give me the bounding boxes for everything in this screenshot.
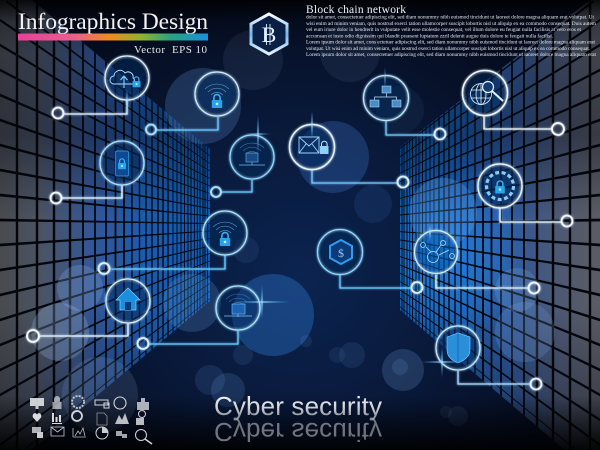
- icon: cloud lock circle: [105, 56, 149, 100]
- icon: laptop wifi circle: [230, 135, 274, 179]
- icon: wifi lock circle centre: [203, 211, 247, 255]
- left perspective grid wall: [0, 0, 210, 450]
- icon: dollar hexagon circle: $: [338, 246, 344, 260]
- icon: laptop circle: [216, 286, 260, 330]
- icon: blockchain hexagon logo: [251, 14, 287, 54]
- icon: shield circle: [436, 326, 480, 370]
- title: Infographics Design: [18, 9, 208, 35]
- icon: blockchain hexagon logo: B: [262, 22, 276, 47]
- body text block: volutpat. Ut wisi enim ad minim veniam, quis nostrud exerci tation ullamcorper suscipit lobortis nisl ut aliquip ex ea commodo consequat.: [306, 46, 590, 52]
- icon: globe magnifier circle: [462, 70, 508, 116]
- connector lines and end nodes: [27, 100, 572, 390]
- cyber security reflection: Cyber security: [214, 417, 382, 447]
- lens flares: [104, 66, 464, 378]
- body text block: Lorem ipsum dolor sit amet, cons ectetuer adipiscing elit, sed diam nonummy nibh euismod tincidunt ut laoreet dolore magna aliquam erat: [306, 40, 596, 46]
- body text block: wisi enim ad minim veniam, quis nostrud exerci tation ullamcorper suscipit lobortis nisl ut aliquip ex ea commodo consequat. Duis autem: [306, 21, 597, 27]
- body text block: dolor sit amet, consectetuer adipiscing elit, sed diam nonummy nibh euismod tincidunt ut laoreet dolore magna aliquam erat volutpat. Ut: [306, 14, 594, 20]
- icon: gear lock circle: [478, 164, 522, 208]
- icon: home circle: [106, 279, 150, 323]
- icon: wifi lock circle top: [195, 72, 239, 116]
- cyber security heading: Cyber security: [214, 391, 382, 421]
- subtitle: Vector EPS 10: [134, 44, 208, 56]
- icon grid row 3: [32, 427, 152, 444]
- right perspective grid wall: [390, 0, 600, 450]
- icon: people network circle: [414, 230, 458, 274]
- body text block: vel eum iriure dolor in hendrerit in vulputate velit esse molestie consequat, vel illum dolore eu feugiat nulla facilisis at vero eros et: [306, 26, 582, 33]
- icon: network circle: [364, 76, 408, 120]
- rainbow title bar: [18, 34, 208, 40]
- bokeh circles: [31, 22, 555, 433]
- body text block: Lorem ipsum dolor sit amet, consectetuer adipiscing elit, sed diam nonummy nibh euismod tincidunt ut laoreet dolore magna aliquam erat: [306, 52, 596, 58]
- icon grid row 1: [30, 396, 149, 410]
- body text block: accumsan et iusto odio dignissim qui blandit praesent luptatum zzril delenit augue duis dolore te feugait nulla facilisi.: [306, 32, 553, 39]
- block chain heading: Block chain network: [306, 4, 406, 16]
- icon: dollar hexagon circle: [318, 230, 362, 274]
- body text block: [306, 14, 597, 58]
- icon grid row 2: [33, 410, 145, 425]
- icon: envelope lock circle: [290, 124, 334, 170]
- icon: phone lock circle: [100, 141, 144, 185]
